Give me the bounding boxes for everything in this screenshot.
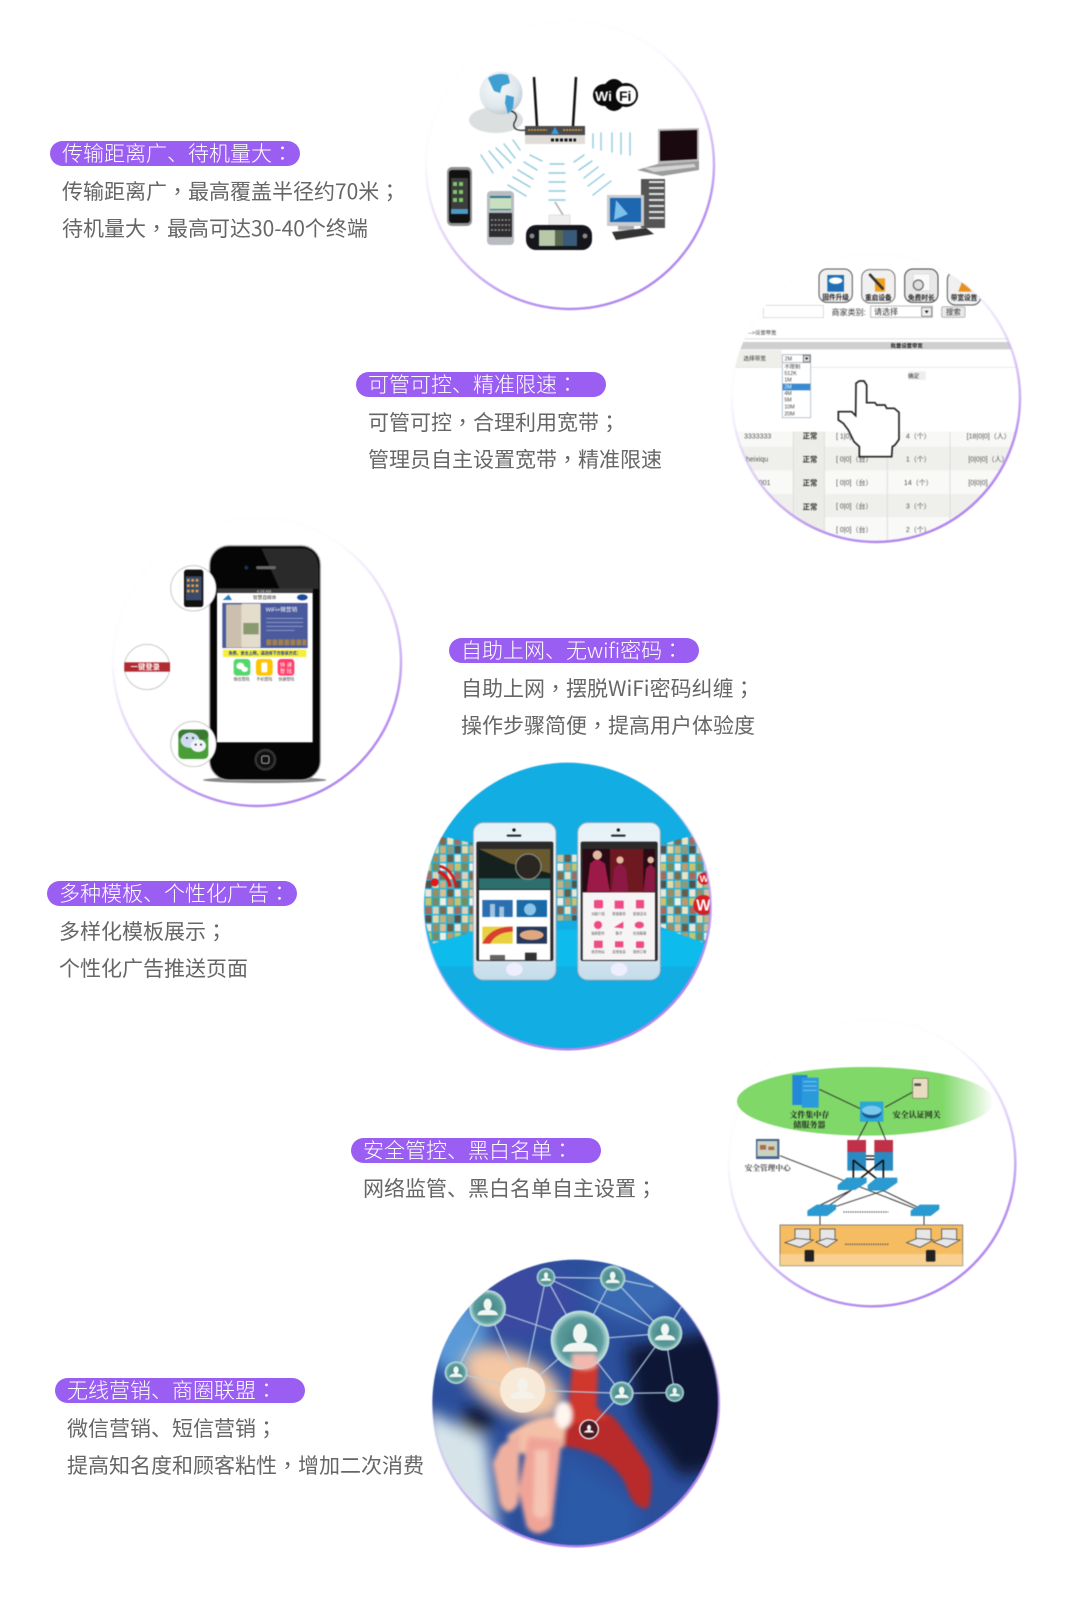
phone right: 我的订单 (633, 949, 647, 954)
text block: transmission distance (50, 138, 400, 243)
icon: red W badges: W (696, 898, 711, 915)
icon: wifi logo (593, 79, 638, 111)
network lines (456, 1277, 683, 1429)
icon: router (511, 77, 585, 144)
purple circle ring (113, 518, 401, 806)
purple circle ring (732, 254, 1020, 542)
phone right: 促销活动 (633, 911, 647, 916)
text block: self-service login (449, 635, 755, 740)
bandwidth dropdown: 2M (784, 385, 792, 391)
heading pill: 自助上网、无wifi密码： (461, 635, 683, 665)
fingertip (572, 1353, 597, 1370)
heading pill: 传输距离广、待机量大： (62, 138, 293, 168)
heading pill: 多种模板、个性化广告： (59, 878, 290, 908)
contact nodes (445, 1266, 684, 1439)
body line: 多样化模板展示； (59, 916, 227, 946)
settings header band (730, 338, 1030, 368)
bandwidth dropdown: 不限制 (784, 363, 800, 371)
phone screen: 智慧自媒体 (253, 594, 277, 601)
data table: 正常 (803, 455, 817, 464)
phone screen: 免费、安全上网，请选择下方登录方式： (229, 650, 301, 656)
network labels: 安全管理中心 (745, 1163, 792, 1174)
bandwidth dropdown: 1M (784, 378, 792, 384)
toolbar buttons: 免费时长 (908, 293, 935, 302)
data table: [ 0|0]（台） (836, 455, 872, 464)
text block: security control (351, 1135, 657, 1203)
screenshot content (736, 268, 1016, 540)
phone body: 4:28 AM (257, 588, 271, 593)
phone screen: 快捷登陆 (278, 676, 294, 682)
access switches (807, 1178, 939, 1216)
icon: servers (792, 1075, 819, 1108)
text block: wireless marketing (55, 1375, 424, 1480)
icon: laptop (637, 128, 699, 176)
body line: 自助上网，摆脱WiFi密码纠缠； (461, 673, 755, 703)
icon: globe (469, 72, 523, 133)
data table: [ 0|0]（台） (836, 525, 872, 534)
dotted separator (843, 1210, 888, 1214)
phone right: 收货地址 (591, 949, 605, 954)
confirm button: 确定 (908, 372, 920, 380)
data table: heixiqu (746, 457, 768, 464)
body line: 待机量大，最高可达30-40个终端 (62, 213, 368, 243)
bandwidth dropdown: 2M (785, 357, 792, 363)
phone screen: 登 陆 (280, 667, 293, 675)
icon: one-click login badge (124, 644, 170, 690)
illustration: phone templates (423, 762, 712, 1052)
phone screen: WiFi+微营销 (266, 606, 298, 614)
app icon walls (425, 835, 712, 944)
phone right: 在线客服 (633, 930, 647, 935)
search form: 搜索 (946, 308, 961, 317)
search form (763, 305, 965, 318)
icon: pointer hand cursor (838, 381, 899, 457)
text block: templates (47, 878, 297, 983)
data table: 1（个） (906, 456, 931, 464)
network labels (745, 1109, 941, 1174)
green zone (737, 1067, 994, 1136)
illustration: bandwidth control screenshot (732, 268, 1022, 544)
phone right: 反馈信息 (612, 949, 626, 954)
body line: 个性化广告推送页面 (59, 953, 248, 983)
icon: core router (860, 1102, 883, 1122)
icon: keypad phone (487, 191, 514, 245)
icon: management monitor (756, 1139, 779, 1159)
icon: smartphone (447, 167, 472, 226)
phone right: 独家配件 (591, 930, 605, 935)
heading pill: 可管可控、精准限速： (368, 369, 578, 399)
bandwidth dropdown: 5M (784, 398, 792, 404)
data table: [0|0|0]（人） (968, 479, 1009, 487)
body line: 提高知名度和顾客粘性，增加二次消费 (67, 1450, 424, 1480)
toolbar buttons (819, 269, 981, 305)
data table: 3（个） (906, 503, 931, 511)
settings header band: 批量设置带宽 (891, 341, 923, 349)
data table: 14（个） (904, 479, 933, 487)
data table: 3333333 (744, 433, 771, 440)
signal waves (481, 133, 630, 200)
connection lines (780, 1089, 924, 1230)
data table: 4（个） (906, 432, 931, 440)
body line: 传输距离广，最高覆盖半径约70米； (62, 176, 400, 206)
data table: 2（个） (906, 526, 931, 534)
body line: 操作步骤简便，提高用户体验度 (461, 710, 755, 740)
bandwidth dropdown: 10M (784, 405, 795, 411)
data table: 正常 (803, 478, 817, 487)
icon: wifi logo: Fi (619, 88, 631, 104)
icon: one-click login badge: 一键登录 (131, 663, 160, 672)
text block: bandwidth control (356, 369, 662, 474)
data table: [ 1|0] (台) (836, 431, 865, 440)
body line: 网络监管、黑白名单自主设置； (363, 1173, 657, 1203)
search form: 商家类别: (832, 307, 866, 317)
blue circle background and content (423, 762, 712, 1049)
phone right: 功能介绍 (591, 911, 605, 916)
illustration: marketing network hand (432, 1258, 721, 1548)
heading pill: 无线营销、商圈联盟： (67, 1375, 277, 1405)
data table: [18|0|0]（人） (967, 432, 1011, 440)
data table: n001 (755, 480, 771, 487)
data table: [ 0|0]（台） (836, 478, 872, 487)
phone screen: 手机登陆 (256, 676, 272, 682)
data table (738, 431, 1014, 540)
bandwidth dropdown: 512K (784, 371, 797, 377)
network labels: 安全认证网关 (893, 1109, 941, 1120)
purple circle ring (729, 1020, 1015, 1306)
data table: 正常 (803, 502, 817, 511)
illustration: phone with login options (112, 544, 403, 808)
data table: [ 0|0]（台） (836, 502, 872, 511)
workstation zone (780, 1225, 963, 1266)
search form: 请选择 (874, 307, 898, 317)
body line: 可管可控，合理利用宽带； (368, 407, 620, 437)
phone left (473, 823, 556, 980)
body line: 微信营销、短信营销； (67, 1413, 277, 1443)
phone screen: 快 速 (280, 660, 293, 668)
icon: mini phone badge (171, 566, 216, 611)
body line: 管理员自主设置宽带，精准限速 (368, 444, 662, 474)
network labels: 储服务器 (793, 1120, 825, 1131)
data table: [0|0|0]（人） (968, 456, 1009, 464)
photo background (432, 1258, 720, 1546)
heading pill: 安全管控、黑白名单： (363, 1135, 573, 1165)
confirm button (908, 371, 926, 380)
phone right: 新装服务 (612, 911, 626, 916)
hand (451, 1331, 651, 1533)
icon: red wifi signal (431, 866, 456, 887)
illustration: wifi router and devices (426, 54, 716, 311)
icon: wechat badge (171, 721, 216, 767)
purple circle ring (424, 763, 711, 1049)
icon: red W badges (693, 873, 713, 915)
phone right (578, 823, 660, 980)
network labels: 文件集中存 (789, 1109, 829, 1120)
bandwidth dropdown: 20M (784, 411, 795, 417)
icon: gateway server (913, 1078, 928, 1098)
icon: wifi logo: Wi (595, 88, 612, 104)
phone right: 鞋子 (616, 930, 623, 935)
illustration: network topology (728, 1052, 1018, 1308)
toolbar buttons: 带宽设置 (951, 293, 978, 302)
purple circle ring (426, 21, 714, 309)
purple circle ring (432, 1260, 719, 1546)
icon: red W badges: W (700, 874, 709, 884)
icon: game console (526, 202, 592, 250)
bandwidth dropdown: 4M (784, 391, 792, 397)
phone body (203, 546, 326, 783)
breadcrumb: -->设置带宽 (748, 328, 777, 336)
toolbar buttons: 重启设备 (865, 293, 892, 302)
data table: 正常 (803, 432, 817, 441)
toolbar buttons: 固件升级 (822, 292, 849, 301)
phone screen: 微信登陆 (234, 676, 250, 682)
bandwidth dropdown (782, 355, 811, 418)
settings header band: 选择带宽 (743, 355, 766, 363)
phone screen (217, 593, 313, 742)
icon: desktop computer (607, 179, 665, 240)
core switches (847, 1140, 893, 1184)
